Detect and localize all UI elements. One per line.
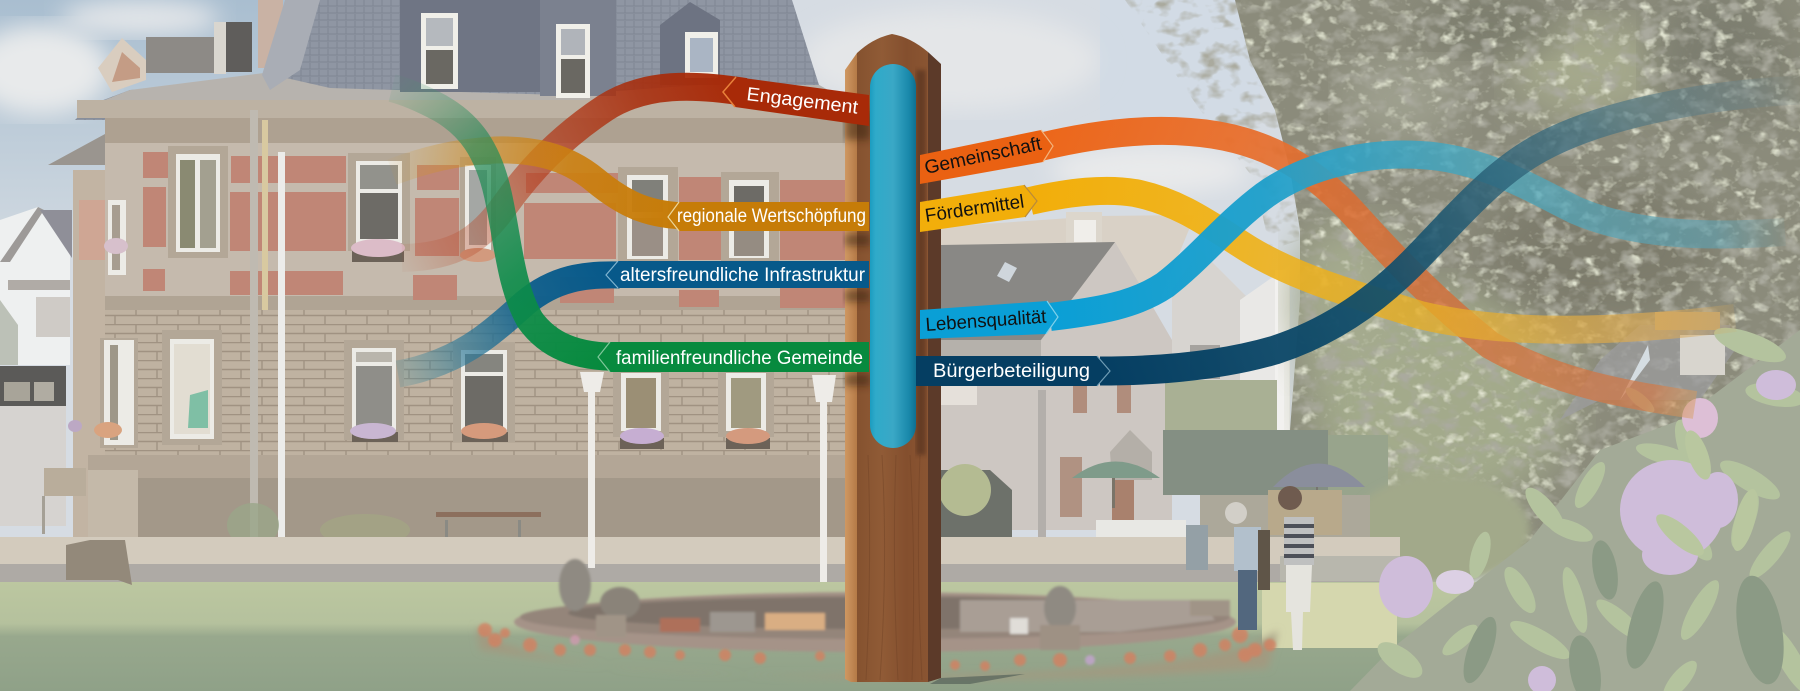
sign: Lebensqualität: Lebensqualität [925, 307, 1048, 336]
ribbon: familienfreundliche Gemeinde (green) [392, 88, 620, 357]
sign: familienfreundliche Gemeinde [598, 342, 869, 372]
green parasol [1072, 462, 1160, 478]
sign: Fördermittel: Fördermittel [924, 191, 1026, 227]
low garage left [0, 366, 66, 526]
signpost: wooden post [845, 34, 1025, 684]
sign: Bürgerbeteiligung: Bürgerbeteiligung [933, 361, 1090, 382]
trees on the right [1125, 0, 1800, 560]
ribbon: Engagement (red) [402, 87, 745, 258]
red brick panels [79, 152, 845, 308]
half-timbered house behind the trees [1560, 325, 1735, 420]
dormer windows [421, 13, 718, 98]
fountain with flower bed [476, 559, 1278, 679]
neighbouring white house left [0, 207, 70, 365]
house right of the post [939, 212, 1290, 545]
ribbon: Bürgerbeteiligung (navy) [1100, 90, 1800, 371]
flower boxes [68, 238, 770, 449]
sign: Fördermittel [920, 185, 1037, 232]
windows [104, 154, 769, 445]
street lamps [580, 372, 836, 582]
white fence [1096, 520, 1186, 544]
shadows of the signs on the post [845, 108, 870, 386]
street and sidewalk [0, 537, 1400, 583]
ribbon: Fördermittel (yellow) [1030, 191, 1735, 330]
window surrounds [100, 146, 779, 448]
sign: Engagement [723, 77, 869, 126]
bench and shrubs at wall foot [42, 468, 715, 565]
rhododendron foreground [1350, 321, 1800, 691]
sign: regionale Wertschöpfung: regionale Wertschöpfung [677, 206, 866, 227]
shadow of the post on the lawn [930, 674, 1025, 684]
flower bed [476, 625, 1278, 679]
ribbon: altersfreundliche Infrastruktur (blue) [398, 275, 620, 374]
sign: Bürgerbeteiligung [916, 356, 1110, 386]
tower side roof [48, 134, 105, 165]
downpipes and flag pole [250, 110, 258, 540]
lawn [0, 582, 1800, 691]
signpost: blue centre bar [870, 64, 926, 455]
sign: familienfreundliche Gemeinde: familienfreundliche Gemeinde [616, 348, 863, 369]
bush by right house [941, 470, 1012, 545]
people with parasol [1186, 464, 1365, 650]
ribbon: regionale Wertschöpfung (ochre) [392, 150, 690, 216]
sign: Engagement: Engagement [745, 84, 860, 119]
hedge and bush [1163, 430, 1530, 585]
sign: regionale Wertschöpfung [668, 202, 869, 231]
town hall roof [75, 0, 846, 120]
ribbon: Lebensqualität (light blue) [1050, 155, 1785, 317]
sign: Gemeinschaft: Gemeinschaft [923, 133, 1044, 179]
tree stump [66, 540, 132, 585]
town hall walls [73, 170, 113, 540]
sign: altersfreundliche Infrastruktur: altersfreundliche Infrastruktur [620, 265, 866, 286]
ribbon: Gemeinschaft (orange) [1040, 131, 1695, 405]
